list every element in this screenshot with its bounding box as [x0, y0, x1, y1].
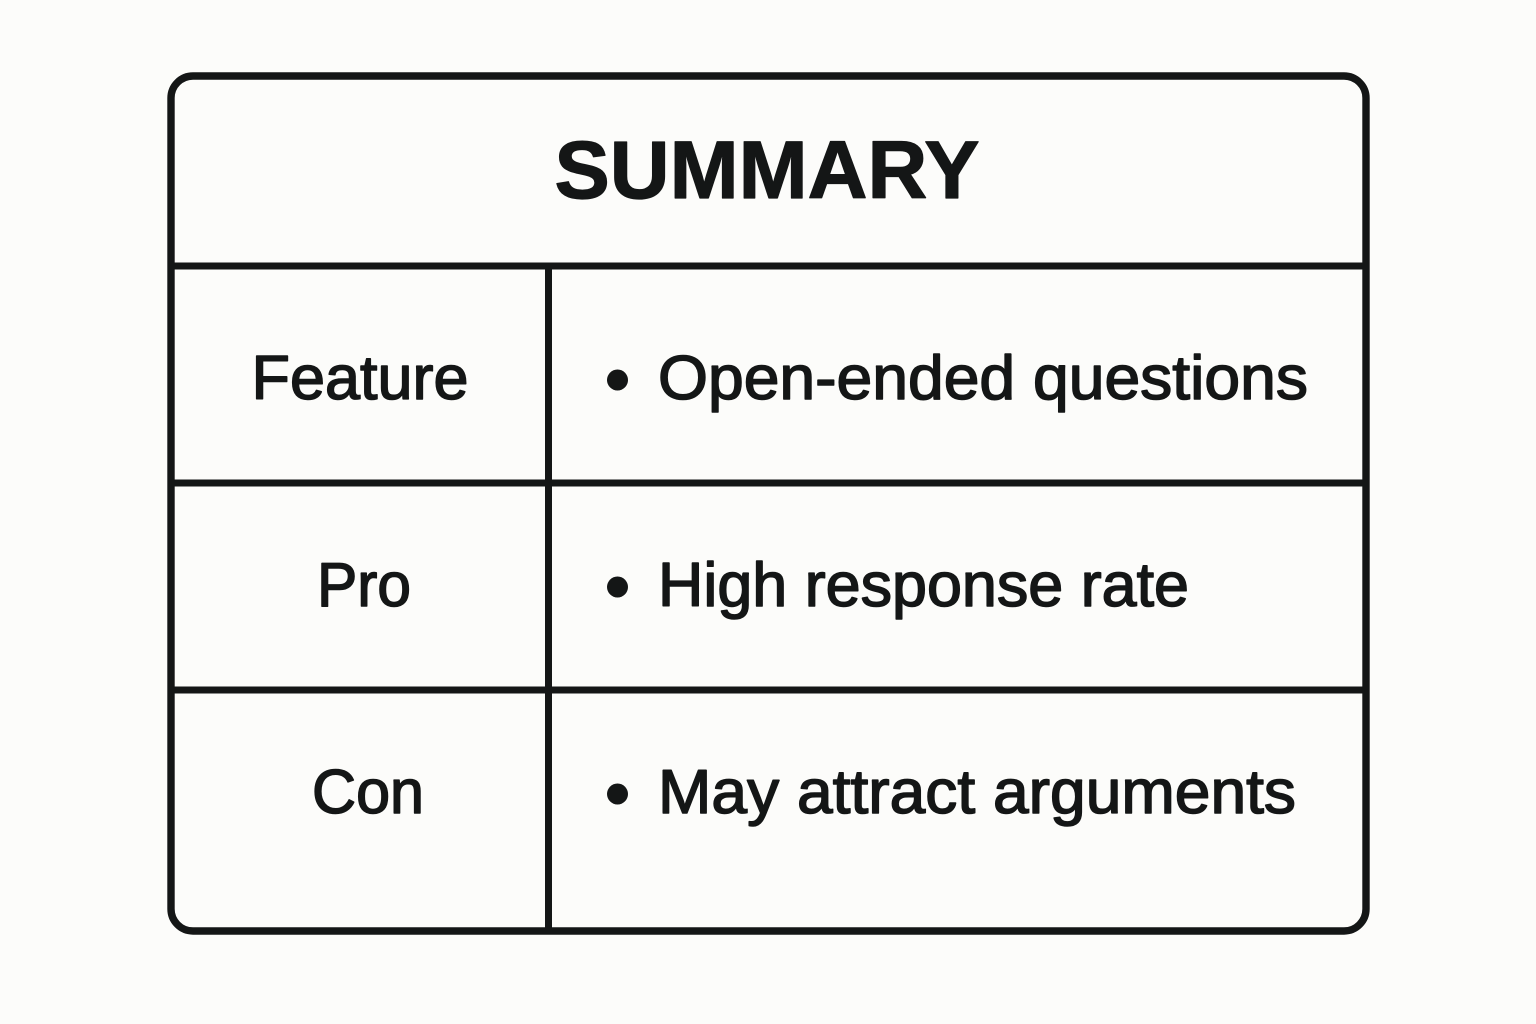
bullet: pro [607, 576, 628, 598]
bullet: feature [607, 370, 628, 390]
heading: summary: SUMMARY [554, 125, 980, 216]
row text: may attract arguments: May attract arguments [658, 757, 1296, 827]
row text: high response rate: High response rate [658, 550, 1189, 620]
panel: summary table [171, 76, 1366, 931]
row label: feature: Feature [252, 343, 468, 413]
row text: open-ended questions: Open-ended questions [658, 343, 1308, 413]
row label: pro: Pro [317, 550, 411, 620]
row label: con: Con [312, 757, 424, 827]
bullet: con [607, 784, 628, 804]
